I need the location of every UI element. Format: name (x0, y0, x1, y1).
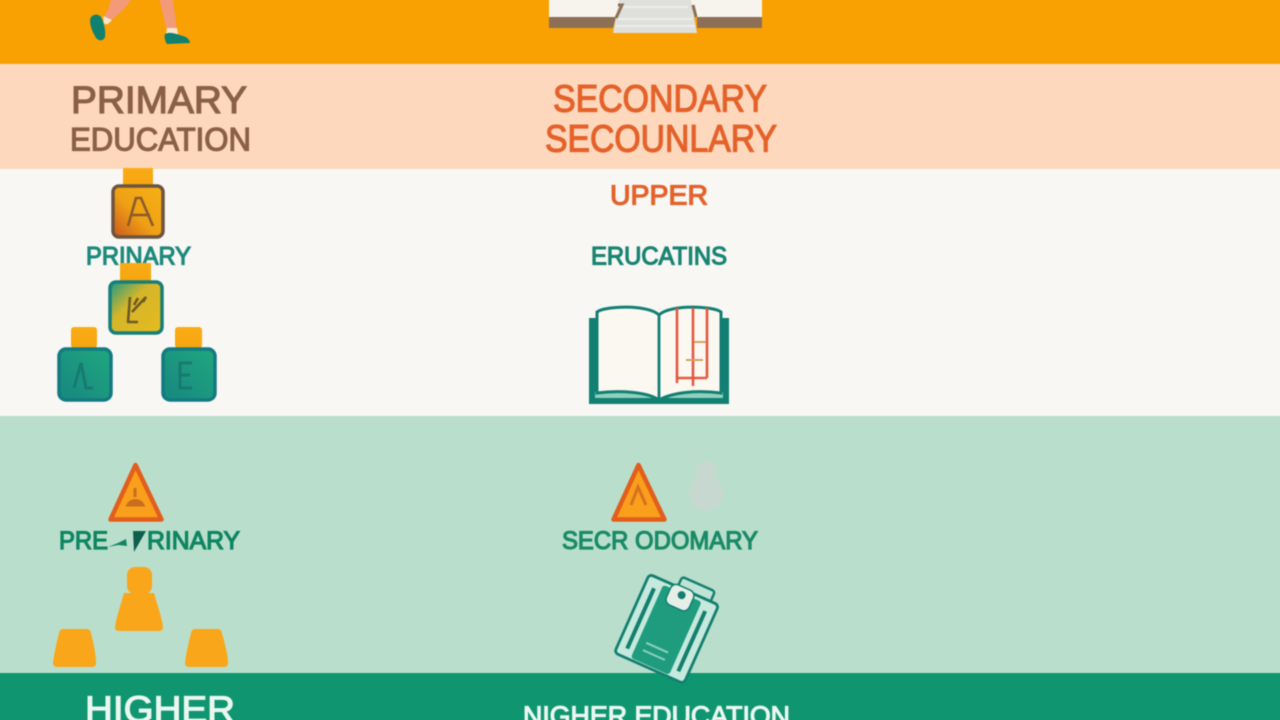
heading: primary education: EDUCATION (70, 122, 251, 158)
icon: right block E (163, 327, 215, 400)
icon: top block A (113, 168, 163, 237)
label: seer odomary: SECR ODOMARY (562, 527, 758, 555)
band: orange header (0, 0, 1280, 64)
band: green higher education (0, 673, 1280, 720)
band: mint pre-primary and secondary (0, 416, 1280, 674)
icon: middle block (110, 263, 162, 333)
heading: secondary (545, 78, 777, 160)
icon: warning triangle left (110, 465, 162, 520)
heading: secondary: SECONDARY (553, 78, 767, 120)
heading: primary education (70, 80, 251, 158)
icon: left orange trapezoid (53, 629, 96, 667)
label: erucatins: ERUCATINS (591, 242, 727, 270)
icon: faded person (689, 461, 723, 511)
heading: secondary: SECOUNLARY (545, 118, 777, 160)
icon: walking legs (90, 0, 190, 44)
label: pre-primary: RINARY (147, 527, 240, 555)
icon: orange figure (115, 567, 163, 631)
label: pre-primary (59, 527, 240, 555)
icon: left block A (59, 327, 111, 400)
icon: open book base (549, 0, 762, 33)
icon: tilted backpack (614, 564, 723, 684)
icon: open book (589, 307, 729, 404)
band: peach titles (0, 64, 1280, 169)
icon: warning triangle right (614, 465, 664, 520)
icon: right orange trapezoid (185, 629, 228, 667)
band: white primary and upper (0, 169, 1280, 416)
label: prinary: PRINARY (86, 242, 191, 270)
heading: primary education: PRIMARY (71, 80, 247, 122)
label: upper: UPPER (610, 180, 708, 210)
label: pre-primary: PRE (59, 527, 108, 555)
